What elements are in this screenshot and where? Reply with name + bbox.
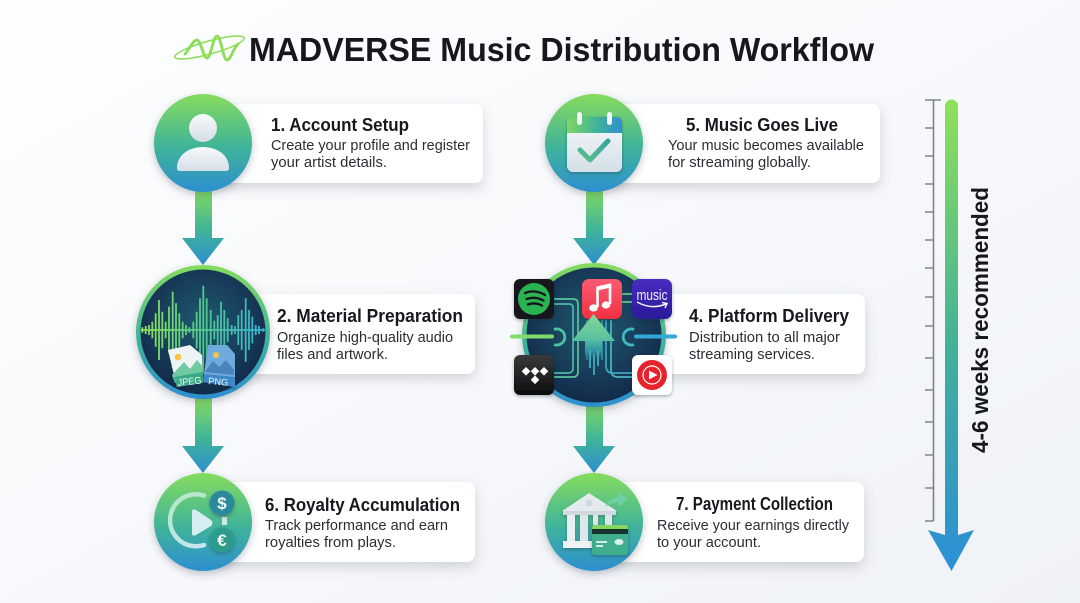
step text: 1. Account Setup	[271, 114, 409, 135]
card	[610, 482, 864, 562]
step text: Receive your earnings directly	[657, 518, 850, 534]
icon: waveform and files	[136, 265, 270, 399]
card	[215, 482, 475, 562]
timeline label: 4-6 weeks recommended	[967, 187, 993, 453]
arrow: step 2 to step 6	[182, 398, 224, 473]
step text: streaming services.	[689, 347, 815, 363]
step text: Your music becomes available	[668, 138, 864, 154]
arrow shaft	[585, 340, 602, 360]
icon: platform hub	[512, 263, 675, 407]
panel: step 4 platform delivery	[512, 263, 865, 407]
icon: user	[154, 94, 252, 192]
step text: 5. Music Goes Live	[686, 114, 838, 135]
step text: Distribution to all major	[689, 330, 840, 346]
gradient arrow	[928, 100, 974, 571]
arrow head	[572, 314, 615, 341]
step text	[265, 494, 460, 551]
arrow: step 4 to step 7	[573, 400, 615, 473]
panel: step 1 account setup	[154, 94, 483, 192]
step text	[668, 114, 864, 171]
timeline	[925, 100, 993, 571]
icon: Apple Music	[582, 279, 622, 319]
step text: 4. Platform Delivery	[689, 305, 850, 326]
icon: Amazon Music: music	[636, 287, 668, 304]
step text: files and artwork.	[277, 347, 388, 363]
icon: Spotify	[514, 279, 554, 319]
icon: waveform and files: PNG	[208, 376, 229, 389]
step text: to your account.	[657, 535, 761, 551]
card	[235, 294, 475, 374]
step text: your artist details.	[271, 155, 387, 171]
panel: step 5 music goes live	[545, 94, 880, 192]
panel: step 2 material preparation	[136, 265, 475, 399]
card	[215, 104, 483, 183]
step text: for streaming globally.	[668, 155, 811, 171]
ruler	[925, 100, 941, 521]
icon: Amazon Music	[632, 279, 672, 319]
step text: 6. Royalty Accumulation	[265, 494, 460, 515]
step text: 7. Payment Collection	[676, 493, 833, 514]
card	[650, 294, 865, 374]
icon: Madverse logo	[173, 32, 246, 63]
icon: bank and card	[545, 473, 643, 571]
icon: calendar with check	[545, 94, 643, 192]
icon: Tidal	[514, 355, 554, 395]
panel: step 7 payment collection	[545, 473, 864, 571]
step text: Create your profile and register	[271, 138, 470, 154]
icon: waveform and files: JPEG	[177, 376, 202, 389]
arrow: step 5 to step 4	[573, 188, 615, 265]
panel: step 6 royalty accumulation	[154, 473, 475, 571]
arrow: step 1 to step 2	[182, 188, 224, 265]
step text	[657, 493, 850, 551]
step text	[271, 114, 470, 171]
icon: play and currency coins: €	[217, 531, 227, 550]
card	[610, 104, 880, 183]
step text: Track performance and earn	[265, 518, 448, 534]
step text	[689, 305, 850, 363]
icon: play and currency coins	[154, 473, 252, 571]
icon: YouTube Music	[632, 355, 672, 395]
step text: royalties from plays.	[265, 535, 396, 551]
step text	[277, 305, 463, 363]
step text: Organize high-quality audio	[277, 330, 453, 346]
title with logo	[173, 31, 874, 68]
icon: play and currency coins: $	[217, 494, 227, 513]
circuit traces	[552, 294, 634, 377]
step text: 2. Material Preparation	[277, 305, 463, 326]
heading: MADVERSE Music Distribution Workflow	[249, 31, 874, 68]
